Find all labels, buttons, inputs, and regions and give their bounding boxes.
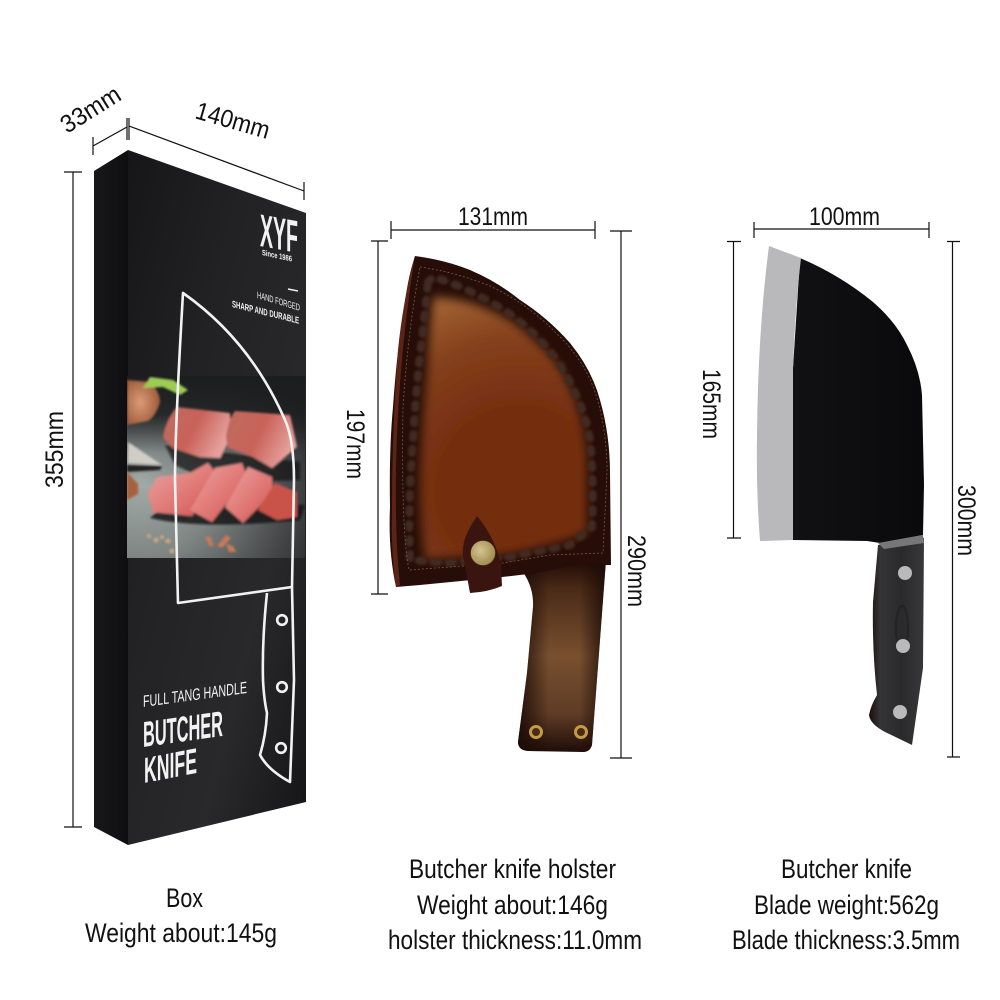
33mm dimension: 33mm — [55, 80, 126, 139]
holster body — [390, 256, 611, 587]
tagline: sharp and durable: SHARP AND DURABLE — [232, 299, 299, 327]
panel: holster — [390, 256, 611, 752]
rivet bottom — [893, 705, 907, 719]
caption: knife: Blade weight:562g — [754, 890, 939, 920]
caption: box: Box — [166, 883, 203, 913]
knife outline drawing — [175, 293, 294, 782]
caption: holster: Butcher knife holster — [409, 854, 616, 884]
131mm dimension — [391, 203, 595, 239]
knife wood grain — [896, 606, 908, 650]
knife bevel steel — [757, 246, 801, 541]
panel: box: BUTCHER — [143, 703, 223, 755]
tagline: hand forged: HAND FORGED — [257, 290, 300, 314]
100mm dimension — [754, 203, 929, 238]
caption: knife — [732, 854, 960, 955]
knife handle — [869, 538, 924, 745]
197mm dimension: 197mm — [341, 409, 369, 479]
panel: knife — [757, 246, 924, 745]
holster left edge highlight — [392, 256, 415, 587]
300mm dimension: 300mm — [952, 485, 980, 556]
caption: knife: Butcher knife — [781, 854, 912, 884]
meat photo band — [127, 376, 305, 558]
full tang handle text: FULL TANG HANDLE — [143, 678, 247, 711]
holster handle sleeve — [518, 560, 606, 752]
131mm dimension: 131mm — [458, 203, 528, 231]
holster leather face — [420, 297, 587, 560]
strap — [463, 516, 502, 593]
355mm dimension — [41, 172, 82, 827]
300mm dimension — [947, 242, 980, 757]
eyelet right — [576, 726, 586, 738]
box front face — [128, 150, 306, 845]
355mm dimension: 355mm — [41, 411, 69, 488]
100mm dimension: 100mm — [809, 203, 880, 231]
box side face — [94, 150, 128, 845]
caption: holster — [388, 854, 642, 955]
rivet top — [898, 566, 912, 580]
panel: box: KNIFE — [144, 740, 197, 791]
knife guard — [878, 535, 924, 549]
caption: holster: Weight about:146g — [417, 890, 608, 920]
stitching line — [403, 267, 607, 570]
caption: box: Weight about:145g — [85, 918, 277, 948]
dash — [288, 289, 298, 291]
snap button — [470, 540, 496, 566]
197mm dimension — [341, 241, 388, 594]
140mm dimension: 140mm — [192, 97, 273, 145]
embossed border pattern — [409, 277, 593, 563]
140mm dimension — [129, 97, 304, 200]
panel: box: XYF — [260, 204, 298, 263]
logo XYF: Since 1986 — [262, 248, 292, 264]
rivet middle — [896, 639, 910, 653]
165mm dimension: 165mm — [697, 369, 725, 439]
eyelet left — [530, 726, 542, 738]
290mm dimension — [610, 231, 650, 758]
dimensions: box — [41, 80, 304, 827]
165mm dimension — [697, 242, 741, 538]
caption: box — [85, 883, 277, 948]
dimensions: knife — [697, 203, 980, 757]
290mm dimension: 290mm — [622, 535, 650, 607]
panel: box — [94, 150, 306, 845]
knife blade black — [793, 258, 924, 543]
dimensions: holster — [341, 203, 650, 758]
logo XYF — [260, 204, 298, 264]
caption: holster: holster thickness:11.0mm — [388, 925, 642, 955]
